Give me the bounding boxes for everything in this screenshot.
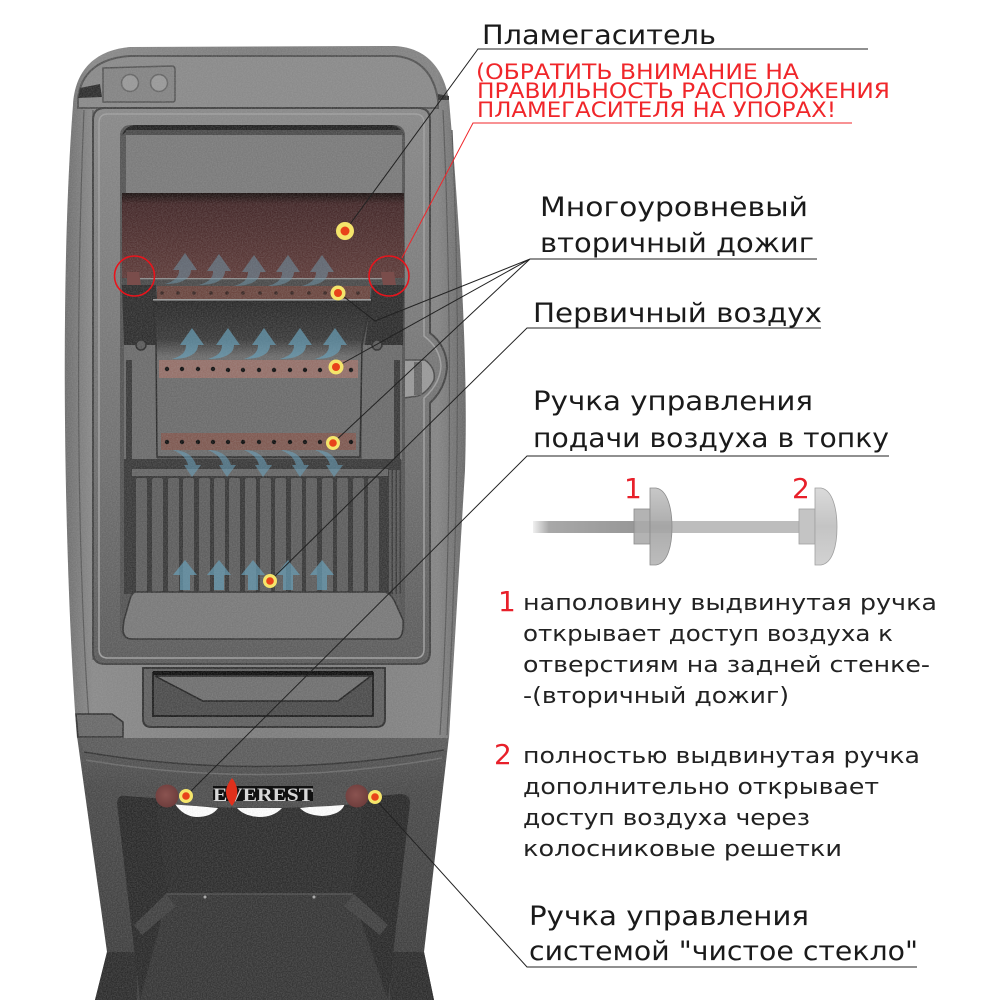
marker: grate [263, 574, 277, 588]
leader: air control handle [186, 456, 889, 796]
heading: multi-level secondary burn: вторичный дожиг [540, 228, 814, 259]
leader: primary air [270, 328, 821, 581]
heading: primary air: Первичный воздух [533, 298, 822, 329]
leader: secondary burn [333, 259, 817, 443]
red circle left [114, 256, 154, 296]
heading: clean glass handle [529, 901, 918, 967]
numbered note 2: дополнительно открывает [523, 775, 879, 800]
ash door handle recess [143, 668, 385, 727]
lower fire-door lip [123, 592, 403, 639]
warning note: ПЛАМЕГАСИТЕЛЯ НА УПОРАХ! [477, 98, 836, 122]
warning note: (ОБРАТИТЬ ВНИМАНИЕ НА [476, 60, 800, 84]
dark sides [122, 285, 160, 360]
stove upper body [65, 46, 466, 738]
air-flow arrows: down row [173, 450, 343, 477]
top plate [78, 56, 449, 108]
heading: flame deflector: Пламегаситель [482, 20, 716, 51]
ledge [122, 278, 404, 287]
rod [533, 521, 800, 533]
heading: air control handle: Ручка управления [533, 386, 813, 417]
flame deflector plate [122, 193, 404, 278]
side strip lines [79, 110, 457, 735]
leader: flame deflector [345, 49, 868, 231]
numbered note 1: 1 [498, 585, 516, 618]
heading: multi-level secondary burn: Многоуровневый [540, 192, 808, 223]
firebox window [120, 125, 405, 639]
leader: clean glass handle [378, 802, 917, 967]
marker: stripe 2 [328, 360, 344, 374]
door frame [93, 108, 447, 664]
numbered note 1 [498, 585, 937, 709]
leader: attention [402, 123, 852, 258]
marker: flame deflector [336, 222, 354, 240]
Everest logo: EVEREST [213, 785, 313, 806]
secondary air stripe 2 [159, 360, 358, 378]
numbered note 2 [494, 738, 920, 862]
marker: clean glass handle [368, 790, 382, 804]
ash compartment opening [117, 794, 410, 1000]
handle position 1 [624, 472, 672, 565]
leader lines [186, 49, 917, 967]
numbered note 1: наполовину выдвинутая ручка [523, 591, 937, 616]
handle position 1: 1 [624, 472, 642, 505]
handle position 2 [792, 472, 837, 565]
numbered note 1: открывает доступ воздуха к [523, 622, 893, 647]
Everest logo [213, 778, 313, 806]
air-flow arrows: middle row [172, 328, 347, 359]
heading: multi-level secondary burn [540, 192, 814, 259]
warning note [476, 60, 890, 122]
upper baffle [126, 128, 402, 193]
secondary air stripe 3 [161, 433, 356, 450]
air-flow arrows: upper row [165, 253, 334, 286]
marker: stripe 3 [326, 436, 340, 450]
marker: air handle [179, 789, 193, 803]
handle position diagram [533, 472, 837, 565]
air-flow arrows: grate row [173, 560, 334, 590]
handle position 2: 2 [792, 472, 810, 505]
stove illustration [50, 40, 480, 1000]
back wall panel [153, 300, 371, 457]
numbered note 2: 2 [494, 738, 512, 771]
heading: air control handle [533, 386, 889, 454]
logo band [168, 785, 357, 808]
heading: air control handle: подачи воздуха в топку [533, 423, 889, 454]
stove base with ash compartment [77, 736, 449, 1000]
red circle right [369, 256, 409, 296]
heading: clean glass handle: системой "чистое стекло" [529, 936, 918, 967]
texture [50, 40, 480, 1000]
numbered note 1: -(вторичный дожиг) [523, 684, 789, 709]
flame deflector stops [127, 272, 396, 285]
control knob right [346, 784, 368, 808]
numbered note 1: отверстиям на задней стенке- [523, 653, 930, 678]
grate [124, 459, 401, 605]
control knob left [156, 784, 178, 808]
heading: clean glass handle: Ручка управления [529, 901, 809, 932]
secondary air stripe 1 [157, 286, 370, 299]
marker: stripe 1 [330, 286, 346, 300]
numbered note 2: колосниковые решетки [523, 837, 842, 862]
base joint detail [76, 714, 123, 737]
numbered note 2: доступ воздуха через [523, 806, 810, 831]
side air handle notch [404, 360, 434, 398]
white cut-outs under logo [175, 803, 345, 817]
warning note: ПРАВИЛЬНОСТЬ РАСПОЛОЖЕНИЯ [477, 79, 890, 103]
numbered note 2: полностью выдвинутая ручка [523, 744, 920, 769]
